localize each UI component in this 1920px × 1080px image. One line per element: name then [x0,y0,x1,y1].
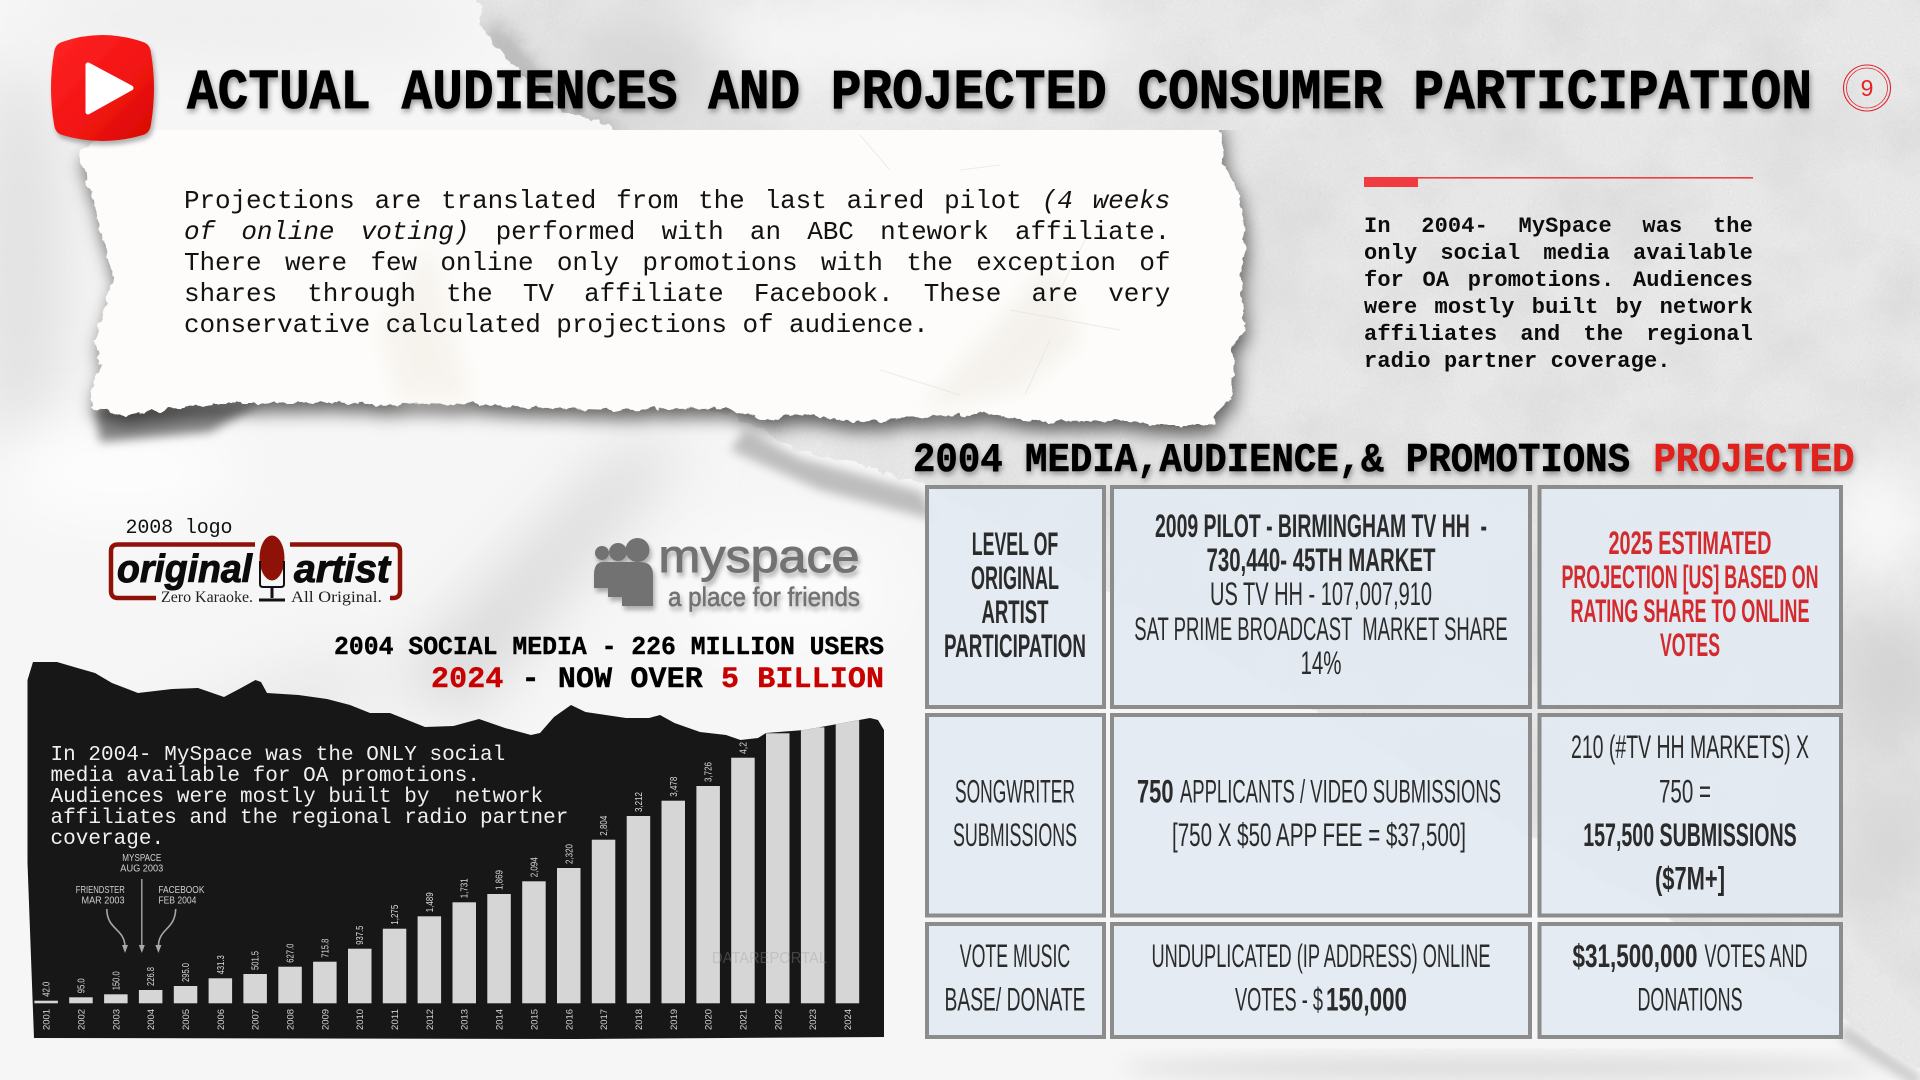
cell: level of original artist participation: PARTICIPATION [944,628,1086,664]
icon: red play button [51,35,154,141]
logo: myspace [594,530,860,612]
headline: social media users [334,632,884,697]
panel: torn paper note [80,118,1245,425]
bar value labels: 627.0 [286,943,296,963]
bar value labels: 431.3 [216,955,227,974]
bar value labels: 1,489 [425,892,436,912]
bar value labels: 295.0 [181,963,192,982]
year axis labels: 2020 [704,1009,715,1030]
cell: 750 applicants [1112,715,1530,916]
annotation: myspace launch [120,852,163,953]
cell: level of original artist participation: ARTIST [982,594,1049,630]
side note text: were mostly built by network [1364,295,1753,320]
year axis labels: 2001 [42,1009,53,1030]
chart caption text: media available for OA promotions. [50,765,480,788]
year axis labels: 2015 [529,1009,540,1030]
bar value labels: 501.5 [251,951,262,970]
cell: unduplicated votes [1112,924,1530,1037]
side note text: radio partner coverage. [1364,349,1671,374]
year axis labels: 2022 [773,1009,784,1030]
year axis labels: 2006 [216,1009,227,1030]
cell: songwriter submissions: SUBMISSIONS [953,817,1077,853]
bar chart: social media users by year [34,720,859,1030]
bar value labels: 1,869 [495,870,506,890]
cell: level of original artist participation [927,487,1104,707]
side note text: affiliates and the regional [1364,322,1753,347]
year axis labels: 2002 [76,1009,88,1030]
row: songwriter submissions [927,715,1841,916]
annotation: facebook launch: FACEBOOK [158,884,204,896]
paper body text: There were few online only promotions with the exception of [184,248,1170,278]
cell: votes and donations: $31,500,000 [1572,938,1698,974]
chart caption text: In 2004- MySpace was the ONLY social [50,744,505,767]
logo: myspace: myspace [658,530,860,582]
logo: original artist [111,536,400,606]
annotation: facebook launch: FEB 2004 [158,894,197,906]
bar value labels: 4,2 [738,742,750,754]
side note text [1364,214,1753,374]
cell: 750 applicants: 750 [1137,774,1174,810]
logo: original artist: artist [294,548,392,591]
cell: votes and donations [1540,924,1841,1037]
paper body text [184,186,1170,340]
logo: myspace: a place for friends [668,582,860,612]
headline: social media users: 2004 SOCIAL MEDIA - 226 MILLION USERS [334,632,884,662]
cell: votes and donations: DONATIONS [1638,982,1742,1018]
bar chart: social media users by year: DATAREPORTAL [712,950,827,967]
year axis labels: 2011 [390,1009,401,1030]
bar value labels: 1,731 [460,878,471,898]
chart caption text: coverage. [50,828,164,851]
side note text: for OA promotions. Audiences [1364,268,1753,293]
year axis labels: 2012 [425,1009,436,1030]
cell: 210 markets: 750 = [1659,774,1711,810]
year axis labels: 2009 [320,1009,331,1030]
page number badge [1844,65,1890,111]
year axis labels: 2023 [808,1009,819,1030]
logo: original artist: All Original. [291,589,382,606]
panel: black torn chart [28,662,884,1039]
cell: unduplicated votes: UNDUPLICATED (IP ADDRESS) ONLINE [1152,938,1490,974]
year axis labels: 2013 [460,1009,471,1030]
caption: 2008 logo: 2008 logo [126,517,232,540]
annotation: friendster launch: FRIENDSTER [76,884,125,896]
paper body text: shares through the TV affiliate Facebook. These are very [184,279,1170,309]
bar value labels: 937.5 [355,925,366,945]
cell: songwriter submissions: SONGWRITER [955,774,1075,810]
heading: table title: PROJECTED [1654,438,1854,484]
year axis labels: 2007 [251,1009,262,1030]
cell: vote music base [927,924,1104,1037]
cell: songwriter submissions [927,715,1104,916]
bar value labels: 226.8 [146,967,157,986]
bar value labels [42,742,750,997]
bar value labels: 2,094 [529,857,540,877]
year axis labels: 2017 [599,1009,610,1030]
year axis labels: 2003 [111,1009,122,1030]
cell: vote music base: BASE/ DONATE [944,982,1086,1018]
year axis labels: 2008 [286,1009,296,1030]
cell: 2009 pilot: SAT PRIME BROADCAST MARKET SHARE [1134,611,1508,647]
paper body text: Projections are translated from the last aired pilot (4 weeks [184,186,1170,216]
bar value labels: 150.0 [111,971,122,990]
table: media, audience and promotions [927,487,1841,1037]
bar value labels: 2,320 [564,844,575,864]
cell: unduplicated votes: VOTES - $ [1235,982,1323,1018]
year axis labels: 2016 [564,1009,575,1030]
year axis labels: 2014 [495,1009,506,1030]
annotation: myspace launch: AUG 2003 [120,862,163,874]
bar value labels: 1,275 [390,904,401,925]
chart caption text [50,744,568,851]
cell: 2025 estimated projection: VOTES [1660,627,1720,663]
year axis labels: 2018 [634,1009,645,1030]
heading: table title: 2004 MEDIA,AUDIENCE,& PROMOTIONS [913,438,1630,484]
chart caption text: Audiences were mostly built by network [50,786,543,809]
side note text: In 2004- MySpace was the [1364,214,1753,239]
year axis labels: 2019 [669,1009,680,1030]
cell: vote music base: VOTE MUSIC [960,938,1070,974]
headline: social media users: 2024 - NOW OVER 5 BILLION [431,663,884,697]
cell: level of original artist participation: ORIGINAL [971,560,1059,596]
bar value labels: 3,726 [704,762,715,782]
side note text: only social media available [1364,241,1753,266]
cell: 2009 pilot: 14% [1300,645,1342,681]
cell: level of original artist participation: LEVEL OF [972,526,1058,562]
chart caption text: affiliates and the regional radio partner [50,807,568,830]
bar value labels: 715.8 [320,938,331,958]
cell: 2009 pilot: 2009 PILOT - BIRMINGHAM TV HH - [1155,508,1487,544]
year axis labels: 2004 [146,1009,157,1030]
cell: 750 applicants: [750 X $50 APP FEE = $37,500] [1172,817,1466,853]
year axis labels [42,1009,854,1030]
cell: unduplicated votes: 150,000 [1326,982,1407,1018]
paper body text: of online voting) performed with an ABC ntework affiliate. [184,217,1170,247]
year axis labels: 2024 [843,1009,854,1030]
year axis labels: 2010 [355,1009,366,1030]
panel: myspace side note [1364,177,1753,374]
cell: 210 markets: ($7M+] [1655,860,1725,896]
annotation: friendster launch: MAR 2003 [82,894,125,906]
cell: 750 applicants: APPLICANTS / VIDEO SUBMISSIONS [1180,774,1501,810]
bar value labels: 95.0 [76,978,88,993]
row: level of participation [927,487,1841,707]
annotation: facebook launch [155,884,204,953]
bar value labels: 3,212 [634,792,645,812]
year axis labels: 2005 [181,1009,192,1030]
cell: 2009 pilot: 730,440- 45TH MARKET [1206,542,1436,578]
cell: 2009 pilot: US TV HH - 107,007,910 [1210,576,1432,612]
bar value labels: 3,478 [669,776,680,797]
row: vote music [927,924,1841,1037]
year axis labels: 2021 [738,1009,750,1030]
cell: 2009 pilot [1112,487,1530,707]
bar value labels: 42.0 [42,981,53,997]
cell: 2025 estimated projection: 2025 ESTIMATED [1608,525,1772,561]
logo: original artist: Zero Karaoke. [161,589,253,606]
annotation: friendster launch [76,884,128,953]
cell: 210 markets [1540,715,1841,916]
annotation: myspace launch: MYSPACE [122,852,161,864]
page number badge: 9 [1861,75,1873,101]
cell: 2025 estimated projection [1540,487,1841,707]
logo: original artist: original [117,548,253,591]
paper body text: conservative calculated projections of audience. [184,310,929,340]
bar value labels: 2,804 [599,815,610,836]
cell: votes and donations: VOTES AND [1704,938,1808,974]
